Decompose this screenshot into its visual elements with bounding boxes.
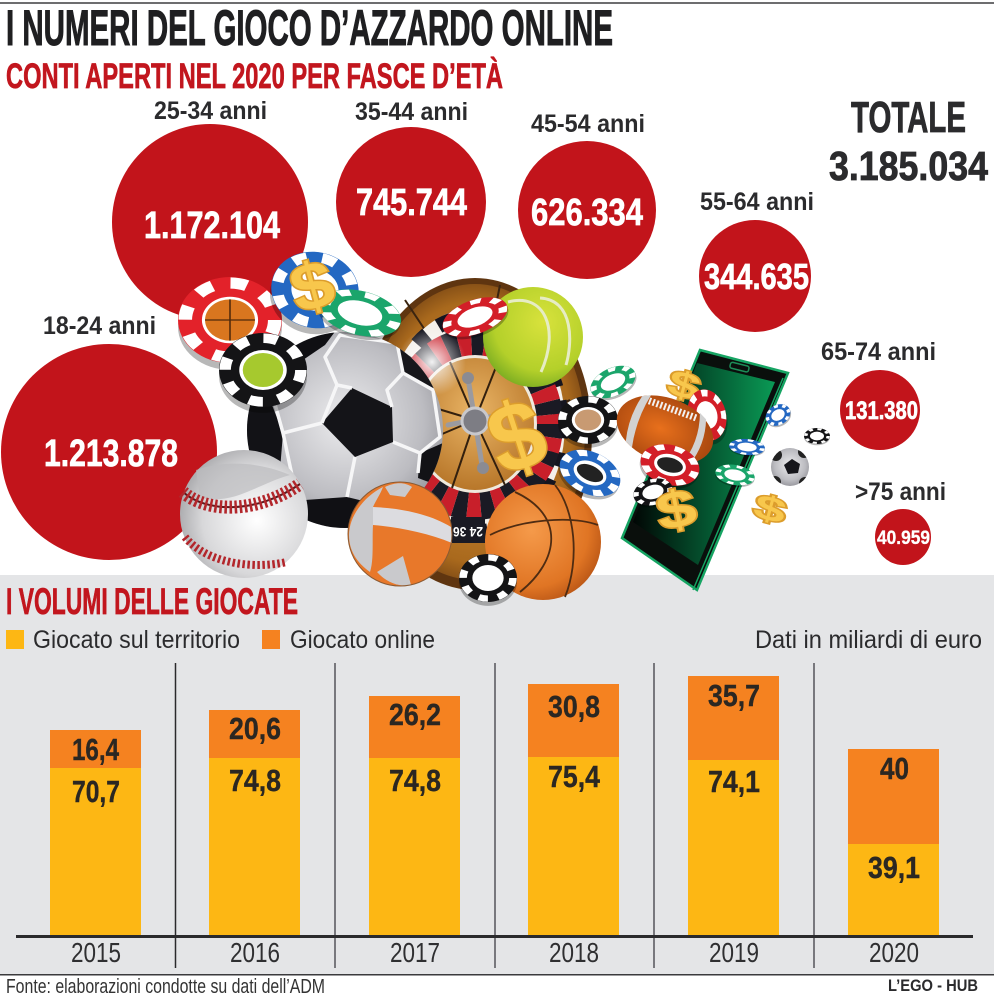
- bubble 25-34: 1.172.104: [144, 205, 280, 247]
- bubble over 75: 40.959: [877, 528, 930, 549]
- icon: roulette wheel: [358, 278, 592, 590]
- axis line: [16, 935, 973, 938]
- bars 2020: 39,1: [868, 850, 920, 885]
- year labels: [71, 937, 919, 968]
- bubble 45-54: [518, 110, 656, 279]
- bubble 18-24: [1, 312, 217, 560]
- icon: red chip with basketball: [178, 277, 282, 370]
- icon: roulette wheel: 24 36: [453, 524, 483, 540]
- top rule: [0, 2, 994, 4]
- bars 2017: [369, 696, 460, 936]
- icon: dollar sign top of phone: $: [663, 362, 705, 409]
- bars 2015: [50, 730, 141, 936]
- icon: dollar sign on phone: $: [651, 478, 702, 543]
- icon: smartphone: [622, 350, 788, 590]
- bubble 35-44: [336, 98, 486, 277]
- bars 2018: 30,8: [548, 689, 600, 724]
- bars 2018: [528, 684, 619, 936]
- icon: small blue chip by phone: [762, 400, 795, 432]
- bubble 25-34: [112, 97, 308, 320]
- credit: L’EGO - HUB: [888, 976, 978, 995]
- bars 2017: 26,2: [389, 697, 441, 732]
- bubble 55-64: 55-64 anni: [700, 188, 814, 216]
- bars 2017: 74,8: [389, 763, 441, 798]
- bars 2016: 74,8: [229, 763, 281, 798]
- icon: red chip on football: [635, 438, 704, 495]
- source note: Fonte: elaborazioni condotte su dati dell’ADM: [6, 976, 325, 998]
- icon: blue chip: [263, 244, 366, 342]
- bars 2019: [688, 676, 779, 936]
- bubble chart: accounts by age: [1, 97, 946, 565]
- footer rule: [0, 974, 994, 976]
- subtitle: accounts by age band: CONTI APERTI NEL 2020 PER FASCE D’ETÀ: [6, 56, 503, 96]
- icon: dollar sign top left: $: [282, 246, 342, 328]
- bars 2020: [848, 749, 939, 936]
- icon: small green chip: [585, 359, 642, 407]
- year labels: 2020: [869, 937, 919, 968]
- icon: tennis ball: [483, 287, 583, 387]
- icon: american football: [607, 383, 723, 477]
- icon: green chip on phone: [713, 462, 756, 490]
- year labels: 2015: [71, 937, 121, 968]
- bubble 18-24: 1.213.878: [44, 433, 178, 475]
- bars 2015: 70,7: [72, 774, 120, 809]
- bubble 65-74: 65-74 anni: [821, 338, 936, 366]
- icon: dollar sign centre: $: [475, 378, 559, 496]
- icon: basketball: [485, 484, 601, 600]
- legend item: territory: Giocato sul territorio: [33, 626, 240, 654]
- bubble 45-54: 626.334: [531, 192, 643, 234]
- bars 2016: [209, 710, 300, 936]
- stacked bar chart: [16, 663, 973, 968]
- bubble over 75: [855, 478, 946, 565]
- icon: red chip upright: [682, 385, 733, 449]
- icon: dollar sign right of phone: $: [749, 487, 790, 532]
- bars 2018: 75,4: [548, 759, 601, 794]
- bars 2020: 40: [880, 751, 909, 786]
- year labels: 2017: [390, 937, 440, 968]
- bubble 35-44: 35-44 anni: [355, 98, 468, 126]
- bubble over 75: >75 anni: [855, 478, 946, 506]
- legend item: online: Giocato online: [290, 626, 435, 654]
- year labels: 2016: [230, 937, 280, 968]
- panel: bar chart background: [0, 575, 994, 974]
- icon: small soccer ball: [771, 448, 809, 486]
- bubble 18-24: 18-24 anni: [43, 312, 156, 340]
- unit note: Dati in miliardi di euro: [755, 626, 982, 654]
- icon: blue chip right: [551, 440, 628, 509]
- icon: white and black chip: [630, 474, 676, 512]
- icon: blue chip on phone: [728, 437, 766, 458]
- bubble 55-64: 344.635: [704, 256, 809, 297]
- icon: black chip with volleyball: [558, 396, 618, 448]
- bars 2016: 20,6: [229, 711, 281, 746]
- bars 2019: 74,1: [708, 764, 760, 799]
- bubble 65-74: [821, 338, 936, 450]
- total: [829, 93, 988, 189]
- illustration: roulette, sports balls and chips: [178, 244, 830, 606]
- year labels: 2018: [549, 937, 599, 968]
- bars 2019: 35,7: [708, 678, 760, 713]
- heading: volumes: I VOLUMI DELLE GIOCATE: [6, 581, 298, 622]
- bubble 55-64: [699, 188, 814, 332]
- icon: green chip: [313, 281, 406, 348]
- icon: black chip with tennis ball: [219, 333, 307, 413]
- bars 2015: 16,4: [72, 732, 120, 767]
- year labels: 2019: [709, 937, 759, 968]
- icon: baseball: [180, 450, 308, 578]
- bubble 65-74: 131.380: [845, 397, 918, 425]
- icon: flat red chip: [437, 289, 514, 347]
- icon: black and white chip bottom: [459, 554, 517, 606]
- glow behind soccer ball: [398, 328, 466, 396]
- icon: soccer ball: [247, 332, 443, 528]
- bubble 45-54: 45-54 anni: [531, 110, 645, 138]
- icon: volleyball: [348, 482, 452, 586]
- icon: tiny black chip: [804, 428, 830, 445]
- bubble 35-44: 745.744: [356, 182, 467, 224]
- bubble 25-34: 25-34 anni: [154, 97, 267, 125]
- legend: [6, 626, 435, 654]
